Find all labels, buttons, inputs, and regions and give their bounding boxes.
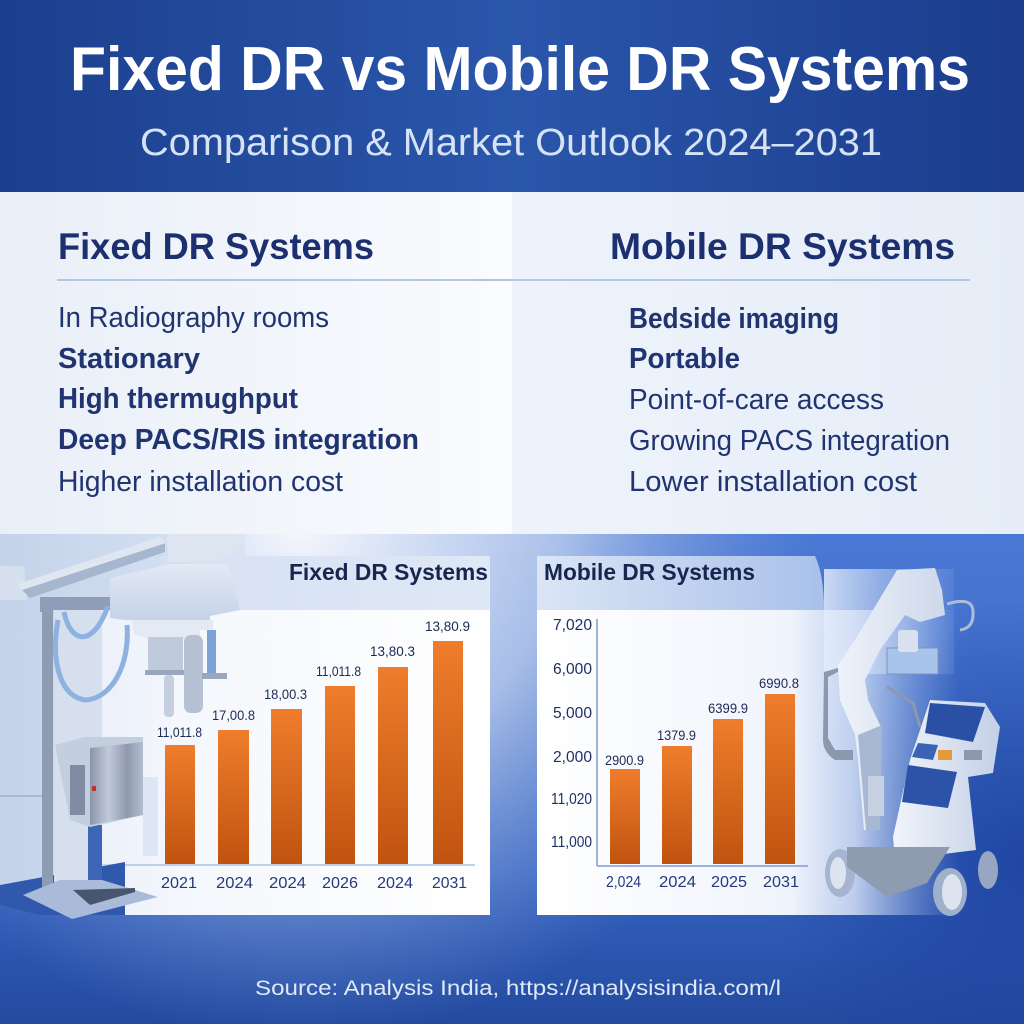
source line: Source: Analysis India, https://analysisindia.com/l <box>255 977 781 1000</box>
y axis labels: 7,020 <box>553 617 592 634</box>
column: mobile DR: Lower installation cost <box>629 466 917 498</box>
column: mobile DR: Point-of-care access <box>629 384 884 416</box>
bar value labels: 11,011.8 <box>316 663 361 679</box>
year labels: 2024 <box>659 874 696 891</box>
mobile bar chart <box>551 617 808 891</box>
fixed chart panel <box>72 556 490 915</box>
column: mobile DR: Mobile DR Systems <box>610 226 955 267</box>
column: fixed DR: Fixed DR Systems <box>58 226 374 267</box>
year labels: 2026 <box>322 875 358 892</box>
year labels <box>606 874 799 891</box>
mobile chart panel <box>537 556 960 915</box>
year labels: 2024 <box>377 875 413 892</box>
bar value labels <box>605 675 799 768</box>
column: fixed DR: Stationary <box>58 343 200 375</box>
y axis labels: 5,000 <box>553 705 592 722</box>
bar value labels: 1379.9 <box>657 727 696 743</box>
title: Fixed DR vs Mobile DR Systems <box>70 35 970 104</box>
bar value labels: 11,011.8 <box>157 724 202 740</box>
panel: comparison <box>0 192 1024 534</box>
bar value labels: 13,80.9 <box>425 618 470 634</box>
column: mobile DR: Portable <box>629 343 740 375</box>
column: fixed DR: Higher installation cost <box>58 466 343 498</box>
header banner <box>0 0 1024 192</box>
column: fixed DR <box>58 226 419 498</box>
year labels: 2025 <box>711 874 747 891</box>
icon: mobile DR machine <box>823 568 1000 916</box>
bar value labels: 6399.9 <box>708 700 748 716</box>
chart heading: Fixed DR Systems <box>289 559 488 585</box>
subtitle: Comparison & Market Outlook 2024–2031 <box>140 122 882 164</box>
year labels: 2031 <box>432 875 467 892</box>
bar value labels <box>157 618 470 740</box>
y axis labels: 6,000 <box>553 661 592 678</box>
bar value labels: 18,00.3 <box>264 686 307 702</box>
column: mobile DR: Growing PACS integration <box>629 425 950 457</box>
wall behind fixed machine <box>0 534 245 900</box>
chart heading: Mobile DR Systems <box>544 559 755 585</box>
column: mobile DR <box>610 226 955 498</box>
y axis labels: 11,000 <box>551 834 592 851</box>
bar value labels: 17,00.8 <box>212 707 255 723</box>
year labels <box>161 875 467 892</box>
year labels: 2024 <box>269 875 306 892</box>
bar value labels: 13,80.3 <box>370 643 415 659</box>
column: fixed DR: High thermughput <box>58 383 298 415</box>
y axis labels: 2,000 <box>553 749 592 766</box>
y axis labels <box>551 617 592 851</box>
fixed bar chart <box>125 618 475 892</box>
column: fixed DR: Deep PACS/RIS integration <box>58 424 419 456</box>
y axis labels: 11,020 <box>551 791 592 808</box>
bar value labels: 2900.9 <box>605 752 644 768</box>
column: fixed DR: In Radiography rooms <box>58 302 329 334</box>
year labels: 2031 <box>763 874 799 891</box>
year labels: 2,024 <box>606 874 641 891</box>
icon: fixed DR machine <box>0 534 246 919</box>
year labels: 2024 <box>216 875 253 892</box>
year labels: 2021 <box>161 875 197 892</box>
bar value labels: 6990.8 <box>759 675 799 691</box>
column: mobile DR: Bedside imaging <box>629 303 839 335</box>
